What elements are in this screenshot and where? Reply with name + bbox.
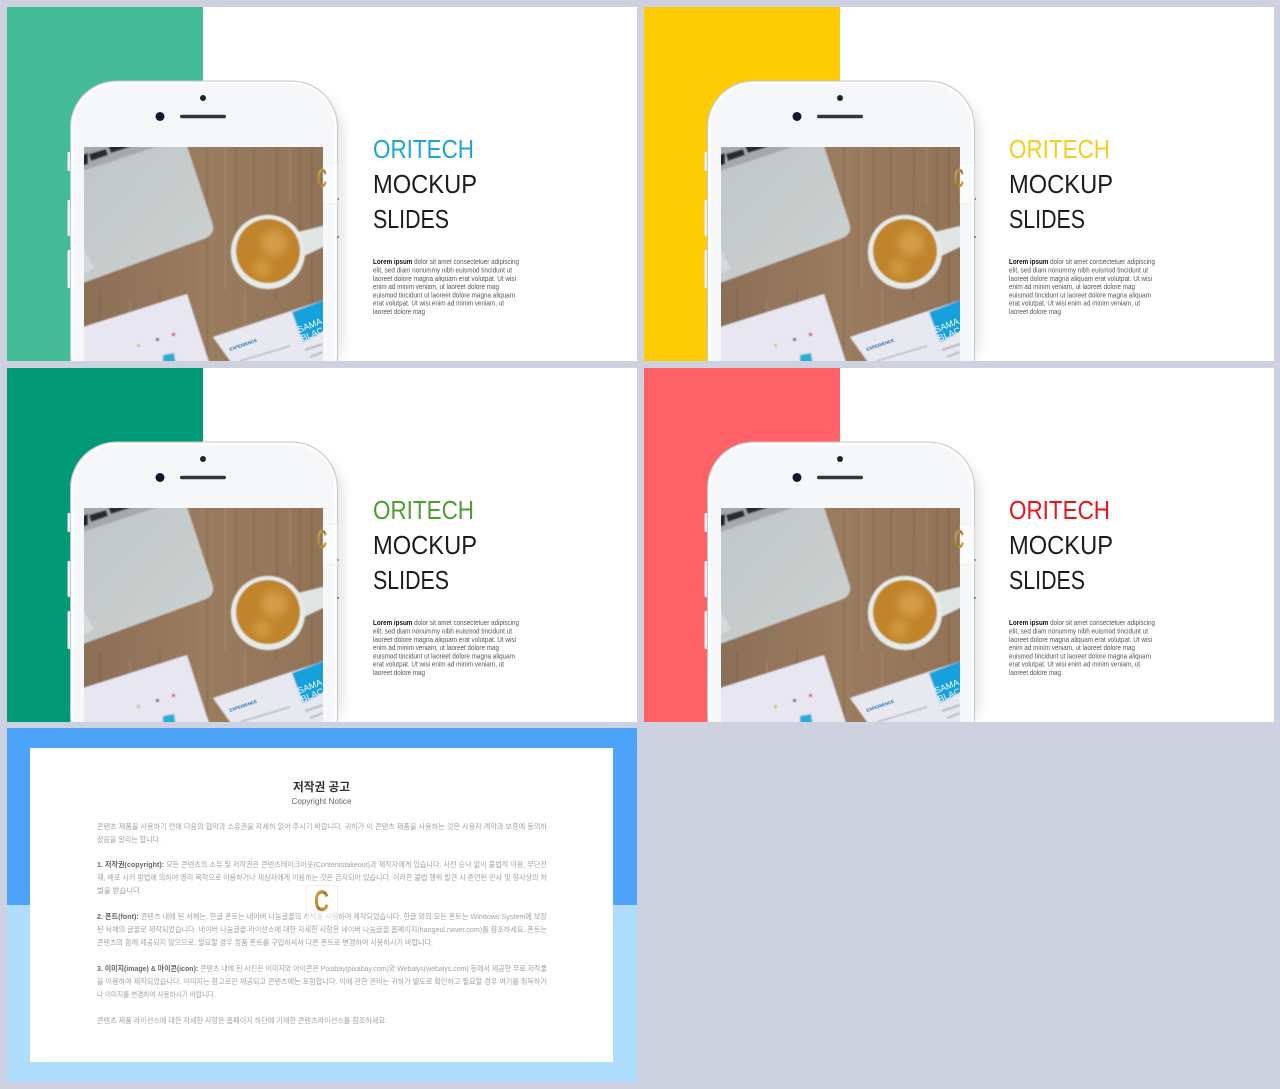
phone mockup <box>68 442 344 762</box>
section 1: copyright: 벌을 받습니다. <box>97 885 142 895</box>
notice subtitle: Copyright Notice <box>292 796 352 806</box>
photo label: SAMA <box>296 677 323 696</box>
watermark: C <box>317 163 327 193</box>
phone mockup <box>704 81 981 401</box>
body text: laoreet dolore magna aliquam erat volutpat. Ut wisi <box>373 635 516 644</box>
heading <box>373 134 477 234</box>
body text: erat volutpat. Ut wisi enim ad minim veniam, ut <box>373 298 504 308</box>
body text: euismod tincidunt ut laoreet dolore magna aliquam <box>1009 652 1151 660</box>
photo caption: EXPERIENCE <box>229 699 258 713</box>
body text <box>373 618 519 677</box>
section 3: image and icon: 3. 이미지(image) & 아이콘(icon): 콘텐츠 내에 된 사진은 이미지와 아이콘은 Pixabay(pixabay.com)와 Webalys(webalys.com) 등에서 제공한 무료 저작물 <box>97 963 547 973</box>
heading: ORITECH <box>373 495 474 525</box>
heading: ORITECH <box>1009 134 1110 164</box>
phone mockup <box>68 81 344 401</box>
body text: elit, sed diam nonummy nibh euismod tincidunt ut <box>373 626 512 636</box>
heading: MOCKUP <box>373 530 477 560</box>
heading: ORITECH <box>1009 495 1110 525</box>
slide background <box>7 7 637 361</box>
slide background <box>7 368 637 722</box>
photo label <box>933 316 964 343</box>
heading: SLIDES <box>373 565 449 595</box>
body text: laoreet dolore mag <box>373 668 425 677</box>
body text: Lorem ipsum dolor sit amet consectetuer adipiscing <box>1009 257 1155 266</box>
body text: elit, sed diam nonummy nibh euismod tincidunt ut <box>1009 266 1148 274</box>
body text: erat volutpat. Ut wisi enim ad minim veniam, ut <box>1009 298 1140 308</box>
body text: Lorem ipsum dolor sit amet consectetuer adipiscing <box>373 257 519 266</box>
body text: laoreet dolore mag <box>373 307 425 316</box>
photo caption: EXPERIENCE <box>229 338 258 352</box>
body text <box>1009 257 1155 316</box>
light blue lower band <box>7 905 637 1082</box>
body text: elit, sed diam nonummy nibh euismod tincidunt ut <box>1009 626 1148 636</box>
colour panel <box>7 7 203 361</box>
heading: SLIDES <box>373 204 449 234</box>
closing line: 콘텐츠 제품 라이선스에 대한 자세한 사항은 홈페이지 하단에 기재한 콘텐츠라이선스를 참조하세요. <box>97 1015 387 1025</box>
colour panel <box>7 368 203 722</box>
watermark: C <box>954 524 964 554</box>
section 2: font <box>97 911 547 947</box>
watermark: C <box>314 885 329 918</box>
photo label <box>296 316 327 343</box>
body text: laoreet dolore magna aliquam erat volutpat. Ut wisi <box>1009 635 1152 644</box>
body text <box>373 257 519 316</box>
intro paragraph: 콘텐츠 제품을 사용하기 전에 다음의 협약과 소유권을 자세히 읽어 주시기 바랍니다. 귀하가 이 콘텐츠 제품을 사용하는 것은 사용자 계약과 보증에 동의하 <box>97 821 547 831</box>
body text: enim ad minim veniam, ut laoreet dolore mag <box>373 643 499 652</box>
slide background <box>644 7 1274 361</box>
slide: teal mockup <box>7 7 637 401</box>
photo caption: EXPERIENCE <box>866 699 895 713</box>
body text: laoreet dolore mag <box>1009 307 1061 316</box>
body text: Lorem ipsum dolor sit amet consectetuer adipiscing <box>373 618 519 627</box>
section 2: font: 콘텐츠의 함께 제공되지 않으므로, 필요할 경우 정품 폰트를 구입하셔서 다른 폰트로 변경하여 사용하시기 바랍니다. <box>97 937 433 947</box>
heading: ORITECH <box>373 134 474 164</box>
body text: Lorem ipsum dolor sit amet consectetuer adipiscing <box>1009 618 1155 627</box>
body text: euismod tincidunt ut laoreet dolore magna aliquam <box>1009 290 1151 300</box>
body text: enim ad minim veniam, ut laoreet dolore mag <box>1009 282 1135 291</box>
photo label: SAMA <box>933 316 960 335</box>
photo label: BLAC <box>299 325 325 343</box>
panel: copyright notice <box>7 728 637 1082</box>
slide background <box>644 368 1274 722</box>
heading: MOCKUP <box>373 169 477 199</box>
watermark: C <box>954 163 964 193</box>
section 3: image and icon: 나 이미지를 변경하여 사용하시기 바랍니다. <box>97 989 216 999</box>
colour panel <box>644 368 840 722</box>
body text: enim ad minim veniam, ut laoreet dolore mag <box>373 282 499 291</box>
body text: euismod tincidunt ut laoreet dolore magna aliquam <box>373 652 515 660</box>
heading <box>1009 495 1113 595</box>
photo caption: EXPERIENCE <box>866 338 895 352</box>
slide: red mockup <box>644 368 1274 762</box>
section 1: copyright: 재, 배포 시키 방법에 의하여 영리 목적으로 이용하거나 제삼자에게 이용하는 것은 금지되어 있습니다. 이러한 불법 행위 발견 시 준언된 민사 및 형사상의 처 <box>97 872 547 882</box>
body text: enim ad minim veniam, ut laoreet dolore mag <box>1009 643 1135 652</box>
blue upper band <box>7 728 637 905</box>
photo label: BLAC <box>936 325 962 343</box>
section 1: copyright: 1. 저작권(copyright): 모든 콘텐츠의 소유 및 저작권은 콘텐츠테이크아웃(Contentstakeout)과 제작자에게 있습니다. 사전 승낙 없이 불법적 이용, 무단전 <box>97 859 547 869</box>
white card <box>30 748 613 1062</box>
section 1: copyright <box>97 859 547 895</box>
heading: MOCKUP <box>1009 530 1113 560</box>
photo label <box>933 677 964 704</box>
intro paragraph: 셨음을 알리는 합니다. <box>97 834 161 844</box>
body text: erat volutpat. Ut wisi enim ad minim veniam, ut <box>373 660 504 668</box>
photo label: BLAC <box>936 686 962 704</box>
photo label <box>296 677 327 704</box>
body text <box>1009 618 1155 677</box>
watermark: C <box>317 524 327 554</box>
body text: laoreet dolore mag <box>1009 668 1061 677</box>
slide: yellow mockup <box>644 7 1274 401</box>
watermark <box>306 885 338 926</box>
heading: MOCKUP <box>1009 169 1113 199</box>
heading: SLIDES <box>1009 204 1085 234</box>
heading <box>1009 134 1113 234</box>
section 2: font: 된 서체의 글꼴로 제작되었습니다. 네이버 나눔글꼴 라이선스에 대한 자세한 사항은 네이버 나눔글꼴 홈페이지(hangeul.naver.com)를 참조하세요. 폰트는 <box>97 924 547 934</box>
section 3: image and icon: 을 이용하여 제작되었습니다. 이미지는 참고로만 제공되고 콘텐츠에는 포함합니다. 이에 관한 권리는 귀하가 별도로 확인하고 필요할 경우 여기를 취득하거 <box>97 976 547 986</box>
intro paragraph <box>97 821 547 844</box>
photo label: BLAC <box>299 686 325 704</box>
body text: elit, sed diam nonummy nibh euismod tincidunt ut <box>373 266 512 274</box>
slide: green mockup <box>7 368 637 762</box>
body text: euismod tincidunt ut laoreet dolore magna aliquam <box>373 290 515 300</box>
colour panel <box>644 7 840 361</box>
heading: SLIDES <box>1009 565 1085 595</box>
body text: laoreet dolore magna aliquam erat volutpat. Ut wisi <box>373 274 516 283</box>
phone mockup <box>704 442 981 762</box>
notice title: 저작권 공고 <box>293 779 350 794</box>
body text: erat volutpat. Ut wisi enim ad minim veniam, ut <box>1009 660 1140 668</box>
photo label: SAMA <box>933 677 960 696</box>
section 3: image and icon <box>97 963 547 999</box>
body text: laoreet dolore magna aliquam erat volutpat. Ut wisi <box>1009 274 1152 283</box>
heading <box>373 495 477 595</box>
photo label: SAMA <box>296 316 323 335</box>
section 2: font: 2. 폰트(font): 콘텐츠 내에 된 서체는, 한글 폰트는 네이버 나눔글꼴의 서체를 사용하여 제작되었습니다. 한글 외의 모든 폰트는 Windows System에 보장 <box>97 911 547 921</box>
